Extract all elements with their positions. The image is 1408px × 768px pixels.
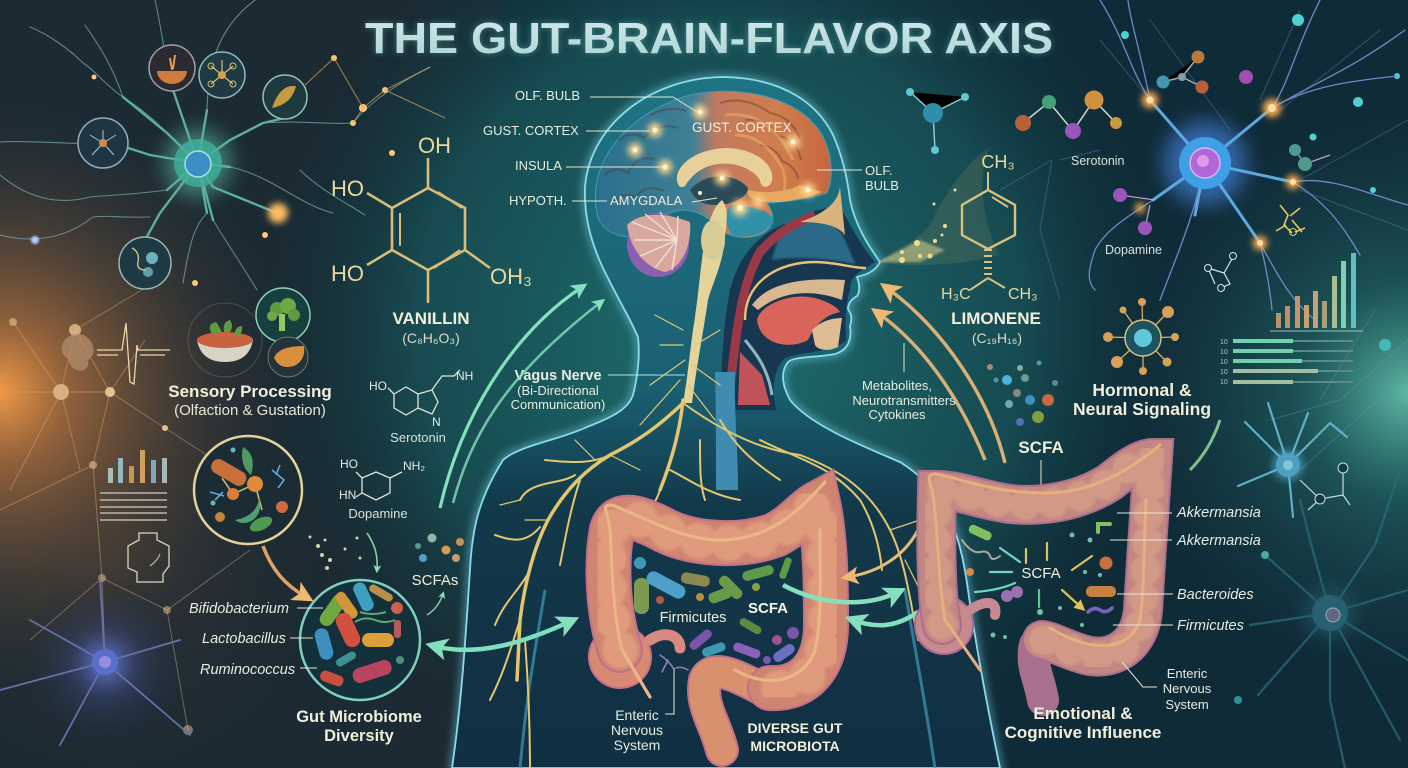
labels: right gut xyxy=(1021,505,1261,712)
illustration: trachea xyxy=(715,372,738,490)
icon: food bowls xyxy=(188,288,310,377)
labels: brain regions left: OLF. BULB xyxy=(515,88,580,103)
heading: emotional and cognitive influence: Cognitive Influence xyxy=(1005,723,1161,742)
labels: central gut: Firmicutes xyxy=(660,610,726,626)
label: metabolites xyxy=(852,343,956,422)
labels: brain regions left: INSULA xyxy=(515,158,562,173)
labels: right gut: System xyxy=(1165,697,1209,712)
labels: right gut: Bacteroides xyxy=(1177,587,1254,603)
arrow: gold to gut xyxy=(848,530,918,577)
heading: emotional and cognitive influence: Emotional & xyxy=(1033,704,1133,723)
molecule: limonene xyxy=(941,152,1041,346)
neuron: top right xyxy=(1089,0,1408,320)
molecule: serotonin small: Serotonin xyxy=(390,430,446,445)
scfas cluster xyxy=(308,533,464,615)
arrow: sensory to microbiome xyxy=(263,546,306,597)
chart: small left bars xyxy=(100,450,167,520)
icon: hormone node xyxy=(1103,298,1179,375)
labels: central gut: System xyxy=(614,737,660,753)
heading: emotional and cognitive influence xyxy=(1005,704,1161,742)
label: vagus nerve: Communication) xyxy=(511,397,605,412)
labels: right gut: Nervous xyxy=(1163,681,1212,696)
labels: brain regions inner: GUST. CORTEX xyxy=(692,120,792,135)
molecule: dopamine small: HN xyxy=(339,488,356,502)
labels: central gut: MICROBIOTA xyxy=(750,738,840,754)
circle: bacteria close-up xyxy=(194,436,302,544)
labels: central gut: Enteric xyxy=(615,707,659,723)
label: olf bulb right: BULB xyxy=(865,178,899,193)
heading: gut microbiome diversity xyxy=(296,708,422,745)
molecule: vanillin: OH₃ xyxy=(490,264,532,289)
molecule: limonene: H₃C xyxy=(941,286,971,303)
molecule: vanillin: HO xyxy=(331,261,364,286)
chart: bars right: 10 xyxy=(1220,369,1228,376)
label: olf bulb right xyxy=(817,163,899,193)
heading: gut microbiome diversity: Diversity xyxy=(324,727,395,745)
molecule: serotonin small xyxy=(369,369,473,445)
molecule: serotonin small: N xyxy=(432,415,441,429)
heading: sensory processing: Sensory Processing xyxy=(168,382,332,401)
heading: sensory processing: (Olfaction & Gustation) xyxy=(174,402,326,419)
labels: right gut: Enteric xyxy=(1167,666,1208,681)
title: THE GUT-BRAIN-FLAVOR AXIS xyxy=(365,15,1053,63)
arrows: central gut to right gut xyxy=(783,585,918,625)
particle cluster xyxy=(987,360,1058,426)
labels: right gut: Akkermansia xyxy=(1176,533,1261,549)
labels: serotonin dopamine right xyxy=(1071,154,1162,257)
labels: microbiome species: Lactobacillus xyxy=(202,631,286,647)
labels: brain regions left xyxy=(483,88,697,208)
molecule: dopamine small: NH₂ xyxy=(403,459,425,473)
molecule: vanillin xyxy=(331,133,532,346)
labels: serotonin dopamine right: Dopamine xyxy=(1105,243,1162,257)
molecule: serotonin small: NH xyxy=(456,369,473,383)
labels: microbiome species: Bifidobacterium xyxy=(189,601,289,617)
molecules: top ball and stick xyxy=(906,50,1208,154)
labels: right gut: Firmicutes xyxy=(1177,618,1244,634)
neuron: right lower xyxy=(1190,403,1350,517)
molecule: limonene: (C₁₉H₁₆) xyxy=(972,330,1022,346)
arrows: up to brain xyxy=(440,287,601,508)
molecule: limonene: CH₃ xyxy=(981,152,1015,172)
illustration: brain xyxy=(595,91,831,403)
neuron: bottom left xyxy=(0,580,190,745)
title: THE GUT-BRAIN-FLAVOR AXIS xyxy=(365,15,1053,63)
chart: bars right xyxy=(1220,253,1363,386)
molecule: dopamine small xyxy=(339,457,425,521)
icon: body torso xyxy=(128,533,169,582)
illustration: right colon xyxy=(915,445,1160,700)
label: metabolites: Cytokines xyxy=(868,407,926,422)
labels: brain regions left: HYPOTH. xyxy=(509,193,567,208)
labels: brain regions inner xyxy=(610,120,792,208)
illustration: vagus nerve branches xyxy=(490,315,930,768)
arrows: up to nose xyxy=(878,288,1005,463)
label: vagus nerve: Vagus Nerve xyxy=(514,368,602,384)
labels: right gut: SCFA xyxy=(1021,565,1061,582)
heading: scfa right xyxy=(1018,438,1064,488)
icon: heartbeat line xyxy=(62,323,170,384)
labels: central gut: Nervous xyxy=(611,722,663,738)
labels: microbiome species: Ruminococcus xyxy=(200,662,295,678)
heading: gut microbiome diversity: Gut Microbiome xyxy=(296,708,422,726)
heading: hormonal and neural signaling: Hormonal & xyxy=(1092,380,1192,400)
illustration: central colon xyxy=(589,482,826,750)
illustration: head interior xyxy=(720,187,875,410)
labels: right gut: Akkermansia xyxy=(1176,505,1261,521)
scent particles xyxy=(878,147,1000,265)
icons: sensory nodes xyxy=(78,45,307,289)
labels: central gut: SCFA xyxy=(748,600,788,617)
molecule: dopamine small: HO xyxy=(340,457,358,471)
neuron: top left xyxy=(0,0,445,290)
labels: microbiome species xyxy=(189,601,323,678)
molecule: vanillin: (C₈H₆O₃) xyxy=(402,330,460,346)
arrow: microbiome to gut xyxy=(434,621,571,650)
chart: bars right: 10 xyxy=(1220,359,1228,366)
label: vagus nerve xyxy=(511,368,685,412)
chart: bars right: 10 xyxy=(1220,349,1228,356)
molecule: limonene: LIMONENE xyxy=(951,309,1041,328)
circle: gut microbiome xyxy=(300,580,420,700)
heading: scfa right: SCFA xyxy=(1018,438,1064,457)
molecule: vanillin: VANILLIN xyxy=(392,309,470,328)
labels: brain regions left: GUST. CORTEX xyxy=(483,123,579,138)
molecule: serotonin small: HO xyxy=(369,379,387,393)
labels: central gut: DIVERSE GUT xyxy=(748,720,843,736)
labels: brain regions inner: AMYGDALA xyxy=(610,193,683,208)
label: metabolites: Metabolites, xyxy=(862,378,932,393)
label: vagus nerve: (Bi-Directional xyxy=(517,383,599,398)
silhouette: human body xyxy=(452,77,1000,768)
labels: serotonin dopamine right: Serotonin xyxy=(1071,154,1125,168)
label: metabolites: Neurotransmitters xyxy=(852,393,956,408)
label: olf bulb right: OLF. xyxy=(865,163,892,178)
scfas cluster: SCFAs xyxy=(412,572,458,589)
molecule: vanillin: HO xyxy=(331,176,364,201)
molecule: dopamine small: Dopamine xyxy=(348,506,408,521)
neuron: bottom right xyxy=(1234,470,1408,768)
molecule: vanillin: OH xyxy=(418,133,451,158)
heading: sensory processing xyxy=(168,382,332,419)
molecule: limonene: CH₃ xyxy=(1008,286,1038,303)
heading: hormonal and neural signaling xyxy=(1073,380,1211,419)
chart: bars right: 10 xyxy=(1220,379,1228,386)
icon: small molecules right xyxy=(1204,205,1305,292)
chart: bars right: 10 xyxy=(1220,339,1228,346)
heading: hormonal and neural signaling: Neural Signaling xyxy=(1073,399,1211,419)
labels: central gut xyxy=(611,600,843,754)
